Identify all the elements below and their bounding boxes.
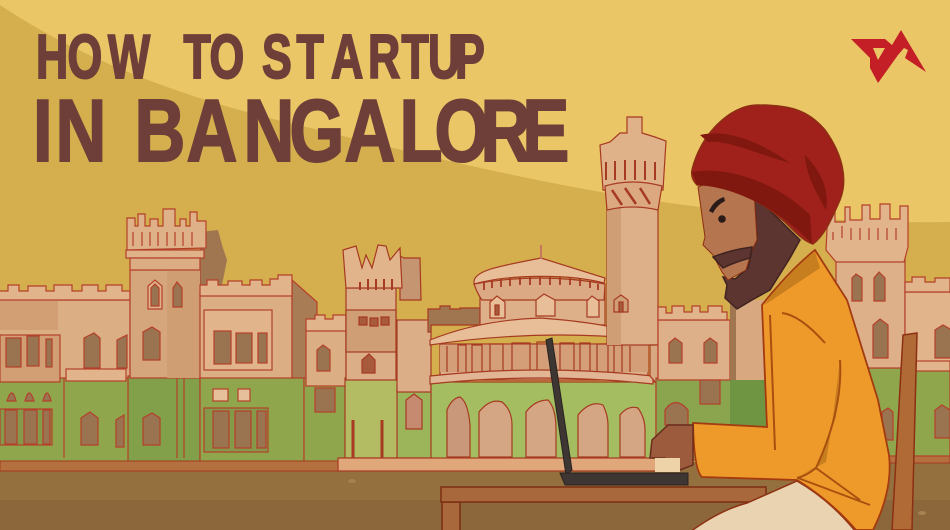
palace left tower <box>126 209 227 463</box>
beard and hair <box>723 183 800 309</box>
title <box>33 23 569 180</box>
kurta <box>693 250 890 530</box>
hand <box>650 425 693 470</box>
palace front plinth centre <box>338 458 666 471</box>
palace left wing <box>0 285 130 462</box>
palace central connecting block <box>397 306 480 458</box>
dhoti <box>690 481 856 530</box>
palace right tower <box>780 204 950 456</box>
moustache <box>713 247 752 268</box>
palace right wing <box>656 300 766 460</box>
palace rotunda <box>430 245 656 459</box>
ground <box>0 462 950 530</box>
kurta shading and folds <box>764 252 870 505</box>
eye and brow <box>709 197 726 223</box>
laptop <box>546 338 688 485</box>
front plinth left and right <box>0 455 950 471</box>
face <box>698 182 757 280</box>
palace tall tower <box>600 117 666 385</box>
icon: logo <box>851 30 926 83</box>
title line 1: HOW TO STARTUP <box>36 23 485 92</box>
palace second wing <box>200 275 317 463</box>
palace small connecting wing <box>304 315 346 463</box>
title line 2: IN BANGALORE <box>33 81 569 180</box>
palace central tower <box>343 245 421 458</box>
chair <box>892 333 917 530</box>
turban <box>692 105 844 244</box>
table <box>441 487 766 530</box>
man <box>650 105 890 530</box>
